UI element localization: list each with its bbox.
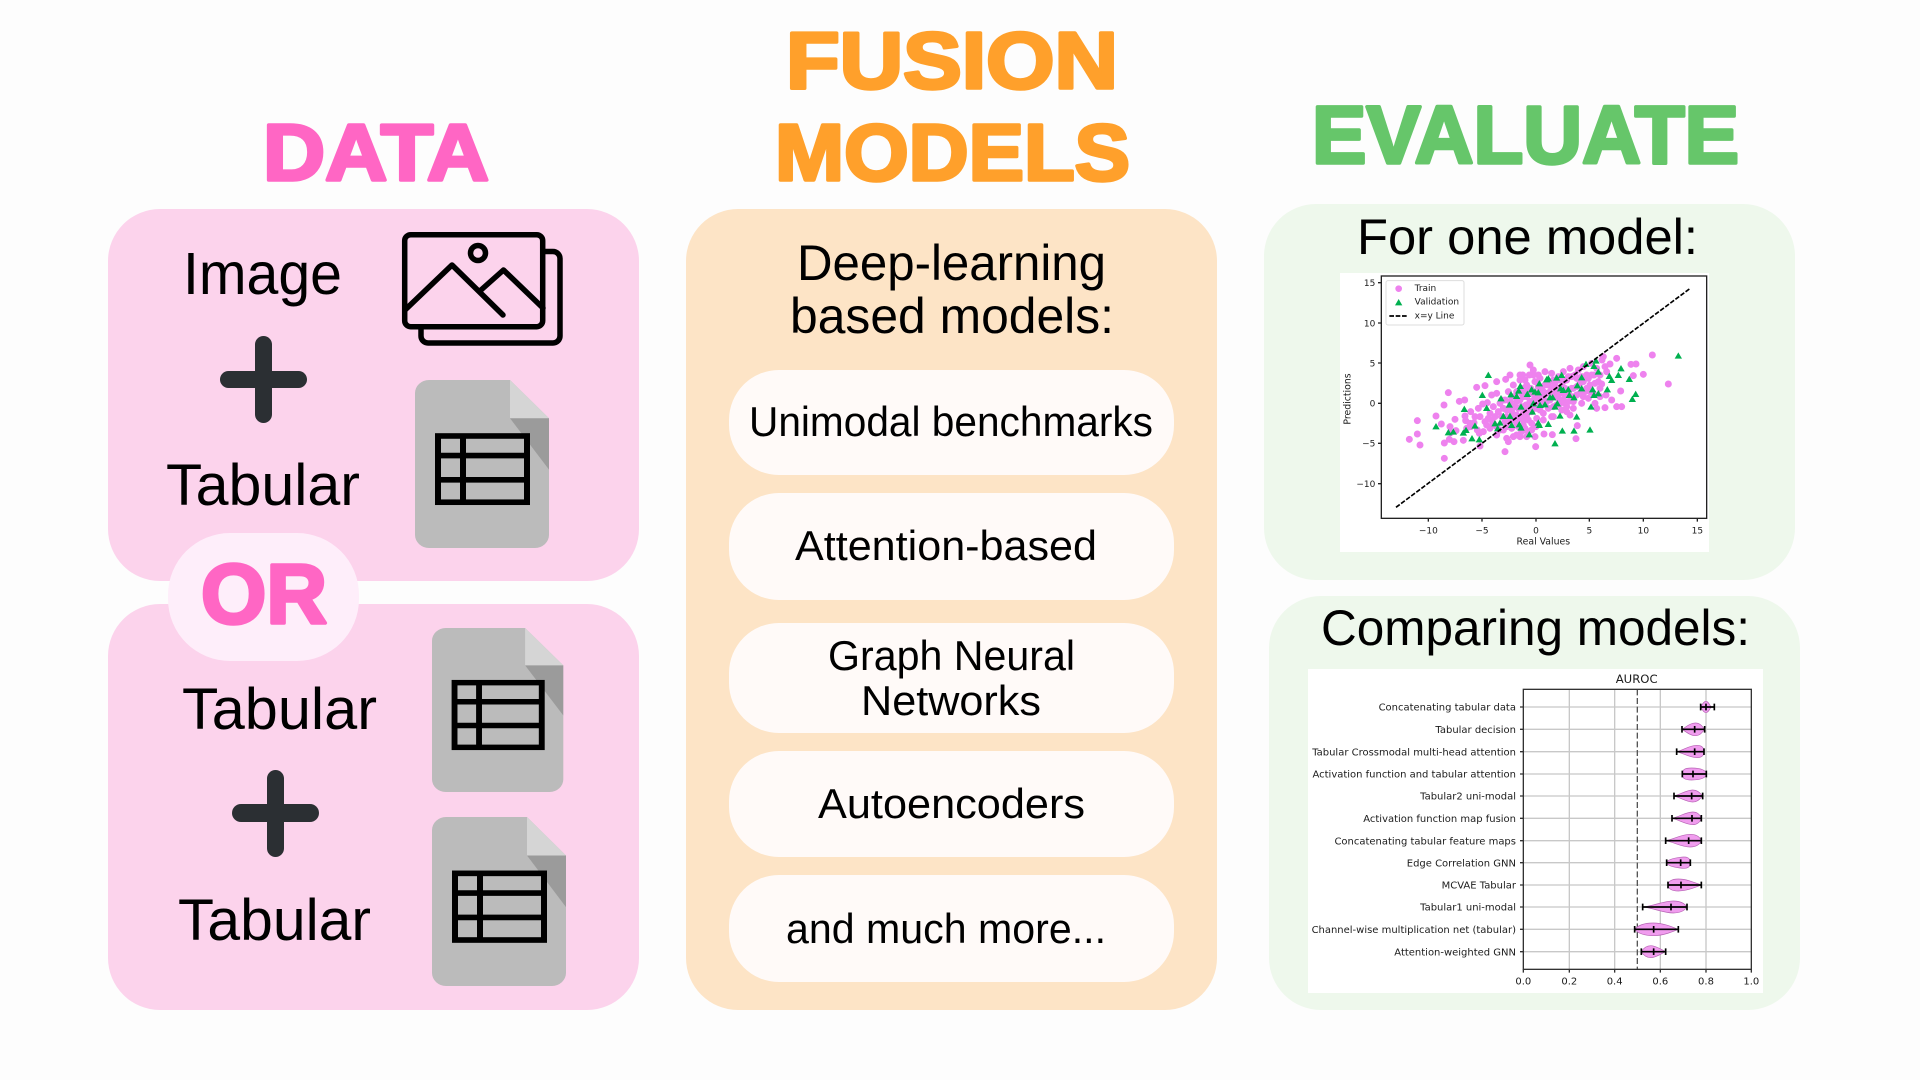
pill: Graph Neural Networks bbox=[729, 623, 1174, 733]
label: Image: Image bbox=[183, 241, 342, 307]
panel: image plus tabular bbox=[108, 209, 639, 581]
axes and ticks: 0 bbox=[1533, 526, 1539, 536]
heading: Deep-learning based models: Deep-learning bbox=[797, 235, 1106, 291]
badge: OR: OR bbox=[201, 547, 327, 641]
pill: Graph Neural Networks: Graph Neural bbox=[828, 632, 1075, 679]
whiskers and medians bbox=[1635, 704, 1714, 955]
pill: and much more bbox=[729, 875, 1174, 982]
row labels: Activation function map fusion bbox=[1363, 814, 1516, 825]
x axis labels: 0.6 bbox=[1652, 977, 1668, 988]
axes and ticks: −5 bbox=[1475, 526, 1489, 536]
x axis labels: 0.4 bbox=[1607, 977, 1623, 988]
row labels: Concatenating tabular feature maps bbox=[1334, 836, 1516, 847]
heading: Deep-learning based models: based models: bbox=[790, 288, 1114, 344]
pill: Unimodal benchmarks: Unimodal benchmarks bbox=[749, 398, 1153, 445]
axes and ticks: −10 bbox=[1419, 526, 1438, 536]
axes and ticks: 10 bbox=[1364, 319, 1376, 329]
row labels: Attention-weighted GNN bbox=[1394, 947, 1516, 958]
label: Tabular: Tabular bbox=[166, 453, 360, 518]
row labels: Edge Correlation GNN bbox=[1407, 858, 1516, 869]
legend: Train bbox=[1414, 284, 1436, 294]
chart: AUROC violin plot bbox=[1308, 669, 1763, 993]
icon: table document one bbox=[432, 628, 563, 792]
axes and ticks: 15 bbox=[1692, 526, 1703, 536]
axes and ticks: 10 bbox=[1638, 526, 1649, 536]
icon: table document two bbox=[432, 817, 566, 986]
axes bbox=[1523, 689, 1751, 969]
x axis labels: 0.2 bbox=[1561, 977, 1577, 988]
row labels: Tabular2 uni-modal bbox=[1419, 792, 1516, 803]
violins bbox=[1635, 701, 1711, 958]
heading: Comparing models: Comparing models: bbox=[1321, 600, 1750, 656]
panel: for one model bbox=[1264, 204, 1795, 580]
pill: and much more: and much more... bbox=[786, 905, 1106, 952]
title: FUSION MODELS bbox=[775, 16, 1130, 197]
icon: plus bbox=[232, 770, 319, 857]
row labels: Channel-wise multiplication net (tabular) bbox=[1312, 925, 1516, 936]
chart: scatter of predictions against real values bbox=[1340, 273, 1709, 552]
row labels: MCVAE Tabular bbox=[1442, 881, 1517, 892]
panel: tabular plus tabular bbox=[108, 604, 639, 1010]
pill: Graph Neural Networks: Networks bbox=[861, 677, 1041, 724]
legend: Validation bbox=[1415, 298, 1459, 308]
scatter: train points bbox=[1409, 355, 1668, 458]
row labels: Tabular decision bbox=[1434, 725, 1516, 736]
x axis labels: 0.8 bbox=[1698, 977, 1714, 988]
label: Tabular one: Tabular bbox=[182, 677, 377, 742]
x axis labels: 0.0 bbox=[1515, 977, 1531, 988]
axes and ticks: 0 bbox=[1370, 400, 1376, 410]
scatter: validation points bbox=[1432, 352, 1682, 446]
badge: OR bbox=[168, 533, 359, 661]
pill: Attention-based: Attention-based bbox=[795, 522, 1097, 569]
panel: comparing models bbox=[1269, 596, 1800, 1010]
axes and ticks: 5 bbox=[1370, 359, 1375, 369]
x=y line bbox=[1396, 288, 1691, 507]
title: FUSION MODELS: FUSION bbox=[786, 16, 1118, 105]
icon: table document bbox=[415, 380, 549, 548]
icon: image stack bbox=[405, 235, 560, 343]
axes and ticks: Real Values bbox=[1517, 536, 1570, 547]
axes and ticks: Predictions bbox=[1342, 373, 1353, 425]
axes and ticks bbox=[1342, 276, 1707, 547]
row labels: Activation function and tabular attention bbox=[1312, 769, 1516, 780]
title: EVALUATE: EVALUATE bbox=[1312, 90, 1739, 181]
legend bbox=[1386, 281, 1464, 325]
pill: Autoencoders: Autoencoders bbox=[818, 780, 1085, 827]
title: AUROC: AUROC bbox=[1616, 672, 1658, 686]
row labels: Tabular Crossmodal multi-head attention bbox=[1311, 747, 1516, 758]
title: FUSION MODELS: MODELS bbox=[775, 108, 1130, 197]
row labels bbox=[1311, 703, 1517, 958]
heading: For one model: For one model: bbox=[1357, 209, 1698, 265]
label: Tabular two: Tabular bbox=[178, 888, 371, 953]
pill: Autoencoders bbox=[729, 751, 1174, 857]
x axis labels: 1.0 bbox=[1743, 977, 1759, 988]
row labels: Concatenating tabular data bbox=[1379, 703, 1516, 714]
x axis labels bbox=[1515, 977, 1759, 988]
row labels: Tabular1 uni-modal bbox=[1419, 903, 1516, 914]
title: DATA: DATA bbox=[263, 108, 489, 197]
axes and ticks: −10 bbox=[1356, 480, 1376, 490]
axes and ticks: 15 bbox=[1364, 279, 1375, 289]
panel: deep-learning models bbox=[686, 209, 1217, 1010]
heading: Deep-learning based models bbox=[790, 235, 1114, 344]
pill: Unimodal benchmarks bbox=[729, 370, 1174, 475]
axes and ticks: −5 bbox=[1362, 440, 1375, 450]
pill: Attention-based bbox=[729, 493, 1174, 600]
legend: x=y Line bbox=[1415, 312, 1455, 322]
axes and ticks: 5 bbox=[1586, 526, 1592, 536]
icon: plus bbox=[220, 336, 307, 423]
